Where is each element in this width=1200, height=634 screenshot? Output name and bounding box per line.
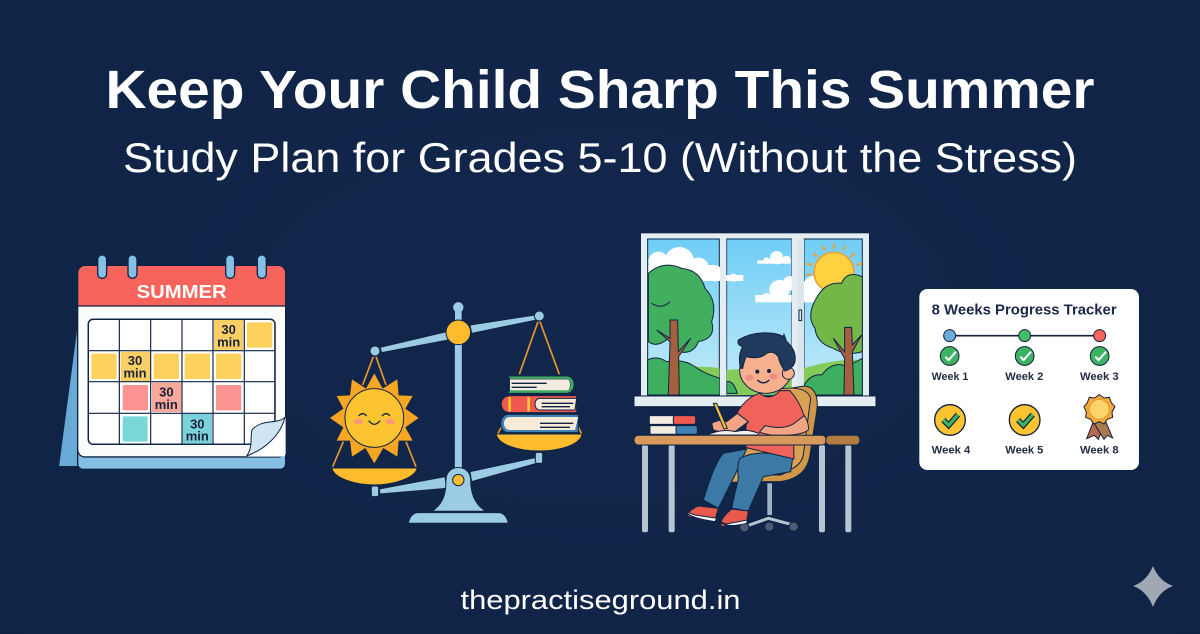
- study scene illustration: [634, 233, 876, 532]
- week labels: Week 2: [1005, 371, 1043, 383]
- small check badges: [940, 347, 1109, 365]
- week labels: Week 5: [1005, 445, 1043, 457]
- hills: [648, 360, 862, 395]
- calendar 30 min labels: min: [155, 397, 178, 412]
- sun in window: [814, 252, 854, 292]
- right tree: [811, 274, 862, 354]
- calendar 30 min labels: min: [186, 429, 209, 444]
- shirt: [737, 391, 804, 459]
- week labels: [932, 371, 1119, 457]
- desk books: [649, 416, 697, 434]
- balance scale illustration: [330, 302, 582, 523]
- week labels: Week 4: [932, 445, 971, 457]
- head: [740, 347, 792, 393]
- left pan: [332, 468, 417, 485]
- chair: [732, 386, 817, 532]
- icon: sun: [330, 373, 419, 463]
- week labels: Week 1: [932, 371, 968, 383]
- desk top: [634, 435, 860, 445]
- subtitle: Study Plan for Grades 5-10 (Without the Stress): [123, 134, 1077, 181]
- calendar 30 min labels: 30: [159, 385, 174, 400]
- window: [641, 233, 869, 397]
- timeline: [944, 330, 1106, 342]
- scale stand: [370, 302, 544, 523]
- gold check badges: [935, 405, 1040, 435]
- calendar 30 min labels: 30: [190, 416, 205, 431]
- desk legs: [642, 445, 851, 532]
- progress tracker card: [919, 289, 1139, 470]
- boy: [687, 333, 808, 527]
- page curl: [245, 417, 286, 457]
- calendar illustration: [58, 255, 286, 469]
- strings: [333, 322, 582, 467]
- clouds: [648, 247, 828, 302]
- icon: sparkle watermark: [1133, 566, 1173, 607]
- pencil: [713, 403, 727, 429]
- icon: medal: [1084, 395, 1115, 439]
- jeans: [703, 449, 747, 508]
- footer website: thepractiseground.in: [460, 585, 740, 615]
- calendar heading: SUMMER: [137, 281, 227, 302]
- week labels: Week 3: [1080, 371, 1119, 383]
- window mullions: [720, 239, 726, 396]
- window sill: [634, 396, 876, 407]
- open notebook: [708, 430, 758, 435]
- calendar 30 min labels: [123, 322, 240, 444]
- right pan: [496, 434, 582, 451]
- calendar grid: [88, 319, 275, 444]
- tracker heading: 8 Weeks Progress Tracker: [932, 302, 1117, 318]
- calendar 30 min labels: min: [217, 334, 240, 349]
- shoes: [688, 506, 718, 520]
- icon: stack of books: [501, 376, 578, 433]
- left tree: [648, 265, 714, 352]
- arms: [759, 416, 808, 435]
- calendar 30 min labels: min: [123, 365, 147, 380]
- week labels: Week 8: [1080, 445, 1119, 457]
- calendar 30 min labels: 30: [221, 322, 236, 337]
- calendar 30 min labels: 30: [128, 353, 142, 368]
- title: Keep Your Child Sharp This Summer: [106, 60, 1094, 120]
